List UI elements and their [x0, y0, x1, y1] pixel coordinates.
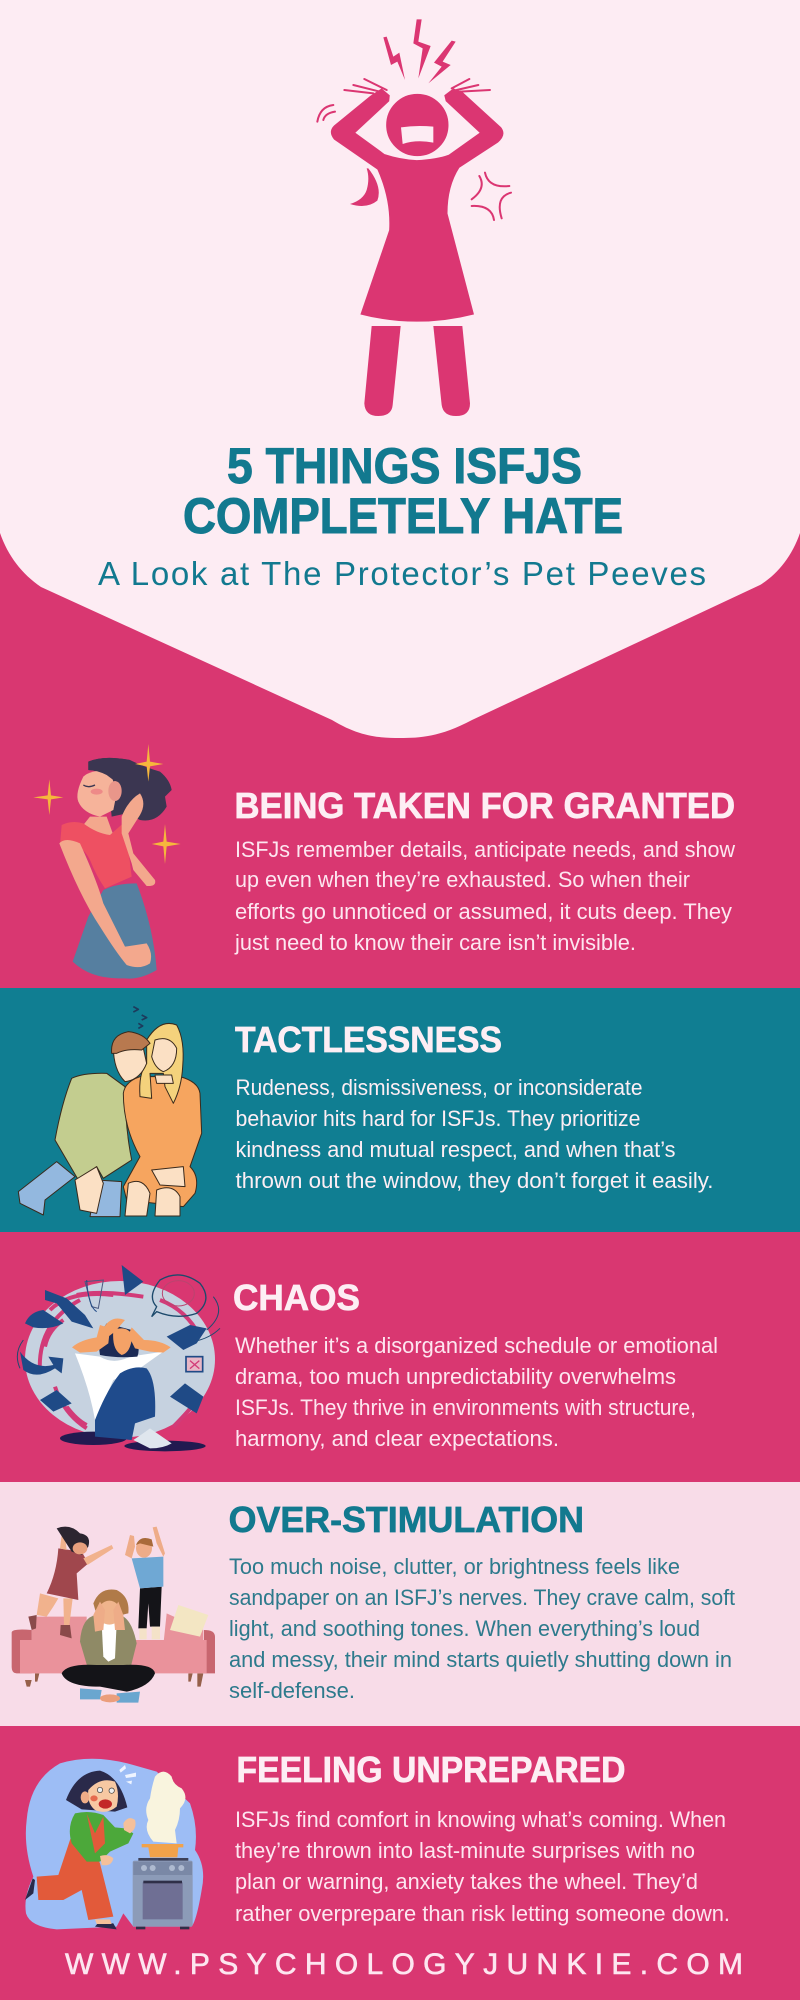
body text: drama, too much unpredictability overwhelms [235, 1364, 676, 1389]
illustration: panicked woman at smoking stove [25, 1759, 203, 1929]
panel: header [0, 0, 800, 738]
body text: just need to know their care isn’t invisible. [234, 930, 636, 955]
body text: rather overprepare than risk letting someone down. [235, 1901, 730, 1926]
heading: FEELING UNPREPARED [236, 1749, 626, 1790]
title: COMPLETELY HATE [183, 488, 623, 544]
body text: thrown out the window, they don’t forget it easily. [236, 1168, 714, 1193]
body text: light, and soothing tones. When everything’s loud [229, 1616, 700, 1641]
panel: being taken for granted [0, 744, 800, 988]
icon: frustrated woman pulling hair [317, 19, 511, 416]
body text: they’re thrown into last-minute surprises with no [235, 1838, 695, 1863]
body text: behavior hits hard for ISFJs. They prioritize [236, 1106, 640, 1131]
website url: WWW.PSYCHOLOGYJUNKIE.COM [65, 1948, 743, 1981]
body text: kindness and mutual respect, and when that’s [236, 1137, 676, 1162]
heading: OVER-STIMULATION [229, 1499, 584, 1540]
body text [235, 1807, 730, 1926]
body text: Rudeness, dismissiveness, or inconsiderate [236, 1075, 642, 1100]
panel: chaos [0, 1232, 800, 1482]
body text: and messy, their mind starts quietly shutting down in [229, 1647, 732, 1672]
illustration: woman with sparkles [33, 744, 181, 979]
body text: ISFJs. They thrive in environments with structure, [235, 1395, 696, 1420]
body text [236, 1075, 714, 1193]
body text: plan or warning, anxiety takes the wheel. They’d [235, 1869, 698, 1894]
body text [235, 1333, 718, 1451]
panel: feeling unprepared [0, 1726, 800, 2000]
heading: BEING TAKEN FOR GRANTED [234, 785, 735, 826]
body text [234, 837, 735, 955]
body text: harmony, and clear expectations. [235, 1426, 559, 1451]
panel: over-stimulation [0, 1482, 800, 1726]
title [183, 438, 623, 544]
body text: Too much noise, clutter, or brightness feels like [229, 1554, 680, 1579]
illustration: mother on sofa with noisy kids [12, 1527, 215, 1703]
subtitle: A Look at The Protector’s Pet Peeves [98, 555, 706, 592]
panel: tactlessness [0, 988, 800, 1232]
body text: efforts go unnoticed or assumed, it cuts deep. They [235, 899, 732, 924]
body text [229, 1554, 735, 1703]
illustration: overwhelmed woman in chaos circle [17, 1265, 220, 1451]
heading: TACTLESSNESS [235, 1019, 502, 1060]
heading: CHAOS [233, 1277, 360, 1318]
title: 5 THINGS ISFJS [227, 438, 582, 494]
body text: ISFJs find comfort in knowing what’s coming. When [235, 1807, 726, 1832]
body text: Whether it’s a disorganized schedule or emotional [235, 1333, 718, 1358]
body text: up even when they’re exhausted. So when their [235, 867, 690, 892]
body text: ISFJs remember details, anticipate needs, and show [235, 837, 735, 862]
body text: sandpaper on an ISFJ’s nerves. They crave calm, soft [229, 1585, 735, 1610]
body text: self-defense. [229, 1678, 355, 1703]
illustration: couple on a bench [18, 1007, 202, 1217]
